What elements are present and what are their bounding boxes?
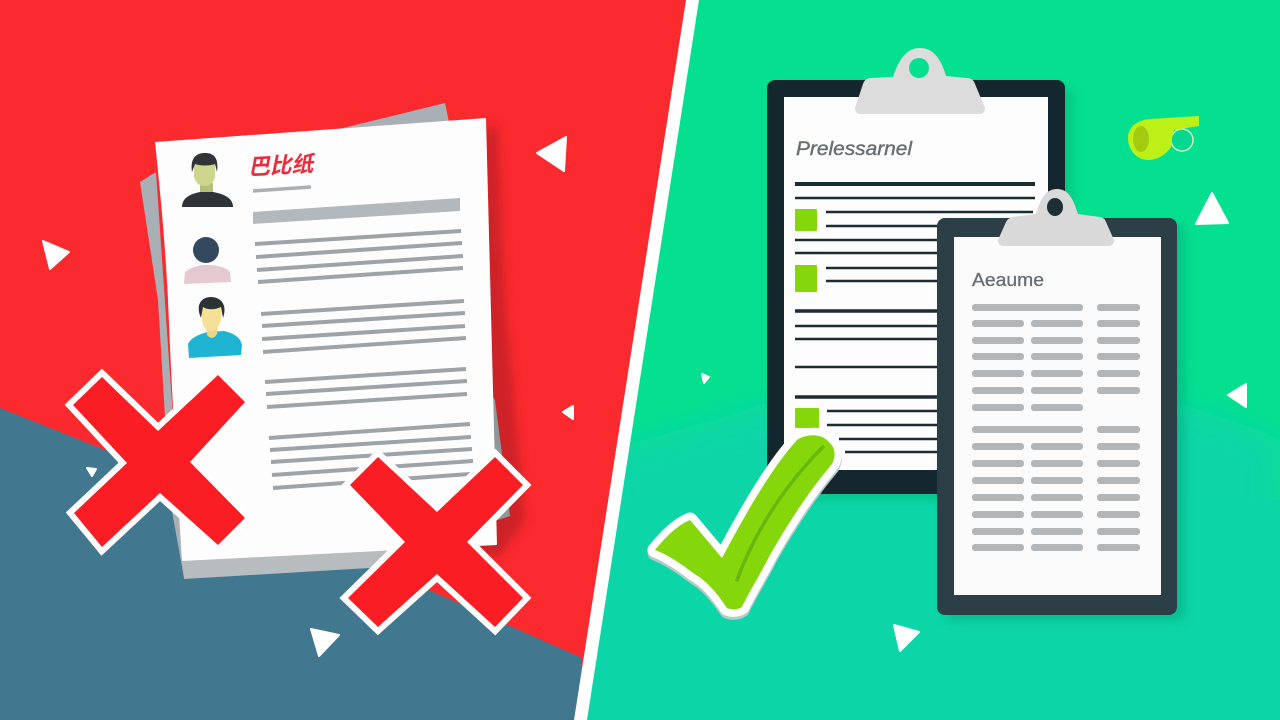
white diagonal divider [574, 0, 699, 720]
paper [784, 97, 1048, 470]
board shadow [945, 224, 1185, 621]
teal hill [621, 396, 1280, 500]
teal lower fill [580, 500, 1280, 720]
clipboard: professional [767, 48, 1073, 500]
clipboard: resume [937, 189, 1185, 621]
back sheet right sliver [488, 390, 510, 520]
text lines block 3 [265, 369, 467, 407]
paper [954, 237, 1161, 595]
back sheet left sliver [140, 172, 184, 578]
grey section header bar [253, 198, 460, 224]
avatar: dark shirt person [182, 153, 233, 207]
avatar: silhouette person [184, 237, 231, 284]
text lines block 4 [269, 424, 473, 488]
heading: Prelessarnel [796, 139, 913, 160]
icon: resume stack with people [140, 103, 525, 579]
slate blue wedge [0, 408, 582, 720]
avatar: teal shirt person [188, 297, 242, 358]
check drop shadow [655, 438, 835, 612]
triangles: right side confetti [702, 193, 1246, 651]
bottom sheet [182, 545, 420, 579]
main sheet [155, 118, 497, 561]
clip hole [1047, 198, 1063, 216]
icon: green check mark [655, 435, 835, 612]
icon: whistle [1128, 116, 1199, 160]
panel: good resume side background [580, 0, 1280, 720]
garbled red name heading: 巴比纸 [247, 151, 317, 180]
check crease [737, 447, 823, 580]
paper shadow [470, 125, 525, 560]
clip [855, 48, 985, 114]
board [767, 80, 1065, 494]
text lines block 1 [255, 231, 463, 282]
green bullets [795, 209, 819, 428]
panel: bad resume side background [0, 0, 695, 720]
board shadow [775, 86, 1073, 500]
clip hole [909, 58, 929, 78]
triangles: left side confetti [43, 137, 573, 656]
icon: red cross left [73, 375, 245, 547]
subtitle line [253, 187, 311, 191]
text lines block 2 [261, 301, 466, 352]
icon: red cross right [348, 457, 523, 627]
text lines [795, 184, 1035, 452]
check outline and fill [655, 435, 835, 609]
clip [998, 189, 1114, 246]
back sheet top sliver [335, 103, 449, 130]
table rows [972, 304, 1140, 551]
heading: Aeaume [972, 270, 1044, 290]
board [937, 218, 1177, 615]
